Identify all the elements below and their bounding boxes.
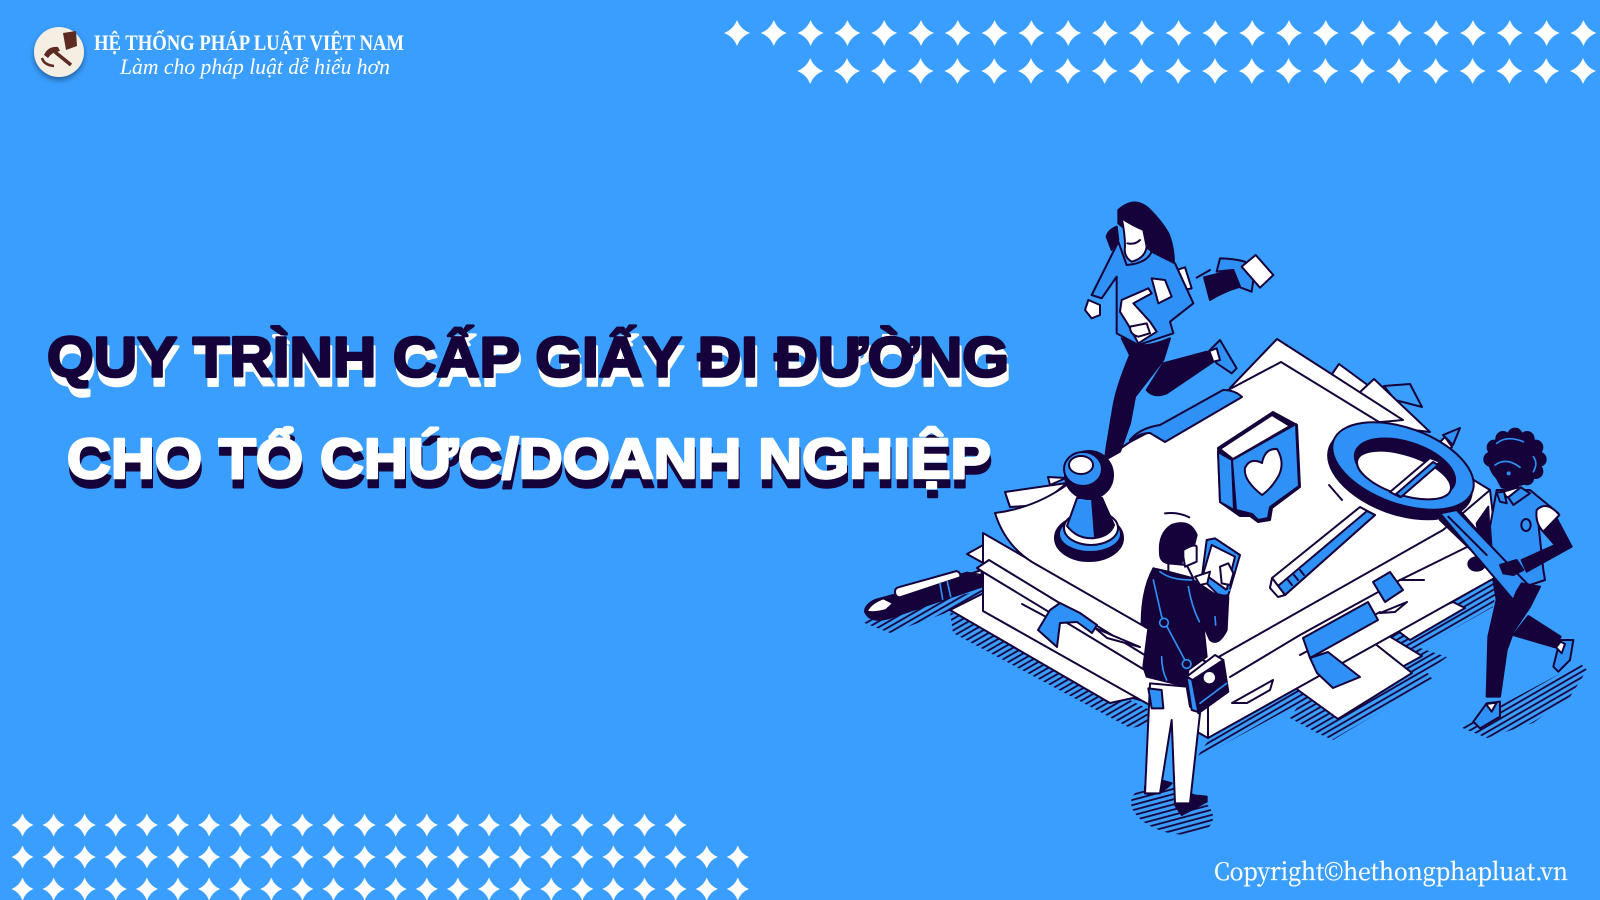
decorative stars: bottom rows 2 and 3 [7,841,753,900]
back paper sheets [1230,339,1430,432]
illustration: document stack with people [862,202,1587,843]
top sheet of the stack [995,362,1490,663]
title line 1: QUY TRÌNH CẤP GIẤY ĐI ĐƯỜNG [47,324,1009,390]
magnifier [1316,405,1525,585]
logo emblem [34,27,84,77]
logo heading: HỆ THỐNG PHÁP LUẬT VIỆT NAM [94,30,404,55]
title line 1: QUY TRÌNH CẤP GIẤY ĐI ĐƯỜNG [49,334,1011,398]
pen on the left of the stack [865,570,982,620]
title line 2: CHO TỔ CHỨC/DOANH NGHIỆP [67,426,991,491]
book body [977,490,1500,738]
decorative stars: top row 1 [719,14,1600,52]
decorative stars: bottom row 1 [7,809,691,841]
decorative stars: top row 2 [792,52,1600,90]
pencil [1270,428,1460,597]
logo tagline: Làm cho pháp luật dễ hiểu hơn [119,54,390,79]
copyright: Copyright©hethongphapluat.vn [1214,852,1568,887]
heart bubble icon [1218,412,1300,522]
stamp [1055,451,1123,561]
hatched ground shadows [862,575,1587,843]
running woman with documents [1085,202,1273,460]
title line 2: CHO TỔ CHỨC/DOANH NGHIỆP [68,435,992,500]
woman carrying magnifier [1440,429,1573,728]
lower papers [950,544,1465,719]
man with tablet and shoulder bag [1142,513,1240,815]
blue bookmarks and pen clips [1022,572,1407,688]
